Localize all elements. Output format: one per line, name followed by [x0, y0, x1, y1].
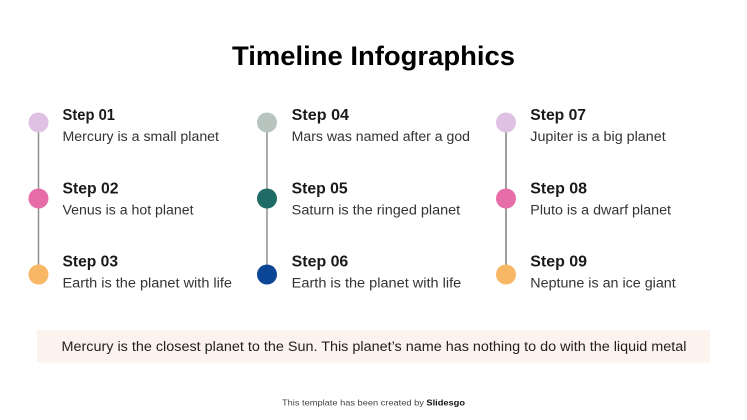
title: Timeline Infographics [232, 41, 515, 71]
step 04 heading: Step 04 [292, 107, 349, 124]
step 02 heading: Step 02 [62, 180, 118, 197]
icon: step 02 dot [28, 188, 48, 208]
step 01 description: Mercury is a small planet [62, 129, 219, 144]
step 02 description: Venus is a hot planet [62, 202, 194, 217]
timeline connector 3 [505, 122, 507, 274]
step 06 description: Earth is the planet with life [292, 276, 461, 291]
icon: step 09 dot [496, 264, 516, 284]
step 05 heading: Step 05 [292, 180, 348, 197]
step 07 description: Jupiter is a big planet [530, 129, 666, 144]
step 04 description: Mars was named after a god [292, 129, 470, 144]
step 07 heading: Step 07 [530, 107, 586, 124]
timeline connector 1 [38, 122, 39, 274]
icon: step 01 dot [28, 112, 48, 132]
icon: step 03 dot [28, 264, 48, 284]
timeline connector 2 [266, 122, 268, 274]
footer credit: This template has been created by Slidesgo [282, 398, 465, 408]
step 03 description: Earth is the planet with life [62, 276, 232, 291]
step 06 heading: Step 06 [292, 254, 349, 271]
panel: steps 07-09 timeline [496, 107, 676, 291]
icon: step 05 dot [257, 188, 277, 208]
step 08 description: Pluto is a dwarf planet [530, 202, 671, 217]
callout banner: Mercury is the closest planet to the Sun. This planet’s name has nothing to do with the liquid metal [62, 339, 686, 354]
step 08 heading: Step 08 [530, 180, 587, 197]
step 01 heading: Step 01 [62, 107, 115, 124]
icon: step 04 dot [257, 112, 277, 132]
step 09 description: Neptune is an ice giant [530, 276, 676, 291]
panel: steps 04-06 timeline [257, 107, 470, 291]
step 05 description: Saturn is the ringed planet [292, 202, 460, 217]
icon: step 08 dot [496, 188, 516, 208]
callout banner [37, 330, 710, 362]
icon: step 06 dot [257, 264, 277, 284]
icon: step 07 dot [496, 112, 516, 132]
step 09 heading: Step 09 [530, 254, 587, 271]
panel: steps 01-03 timeline [28, 107, 232, 291]
step 03 heading: Step 03 [62, 254, 118, 271]
